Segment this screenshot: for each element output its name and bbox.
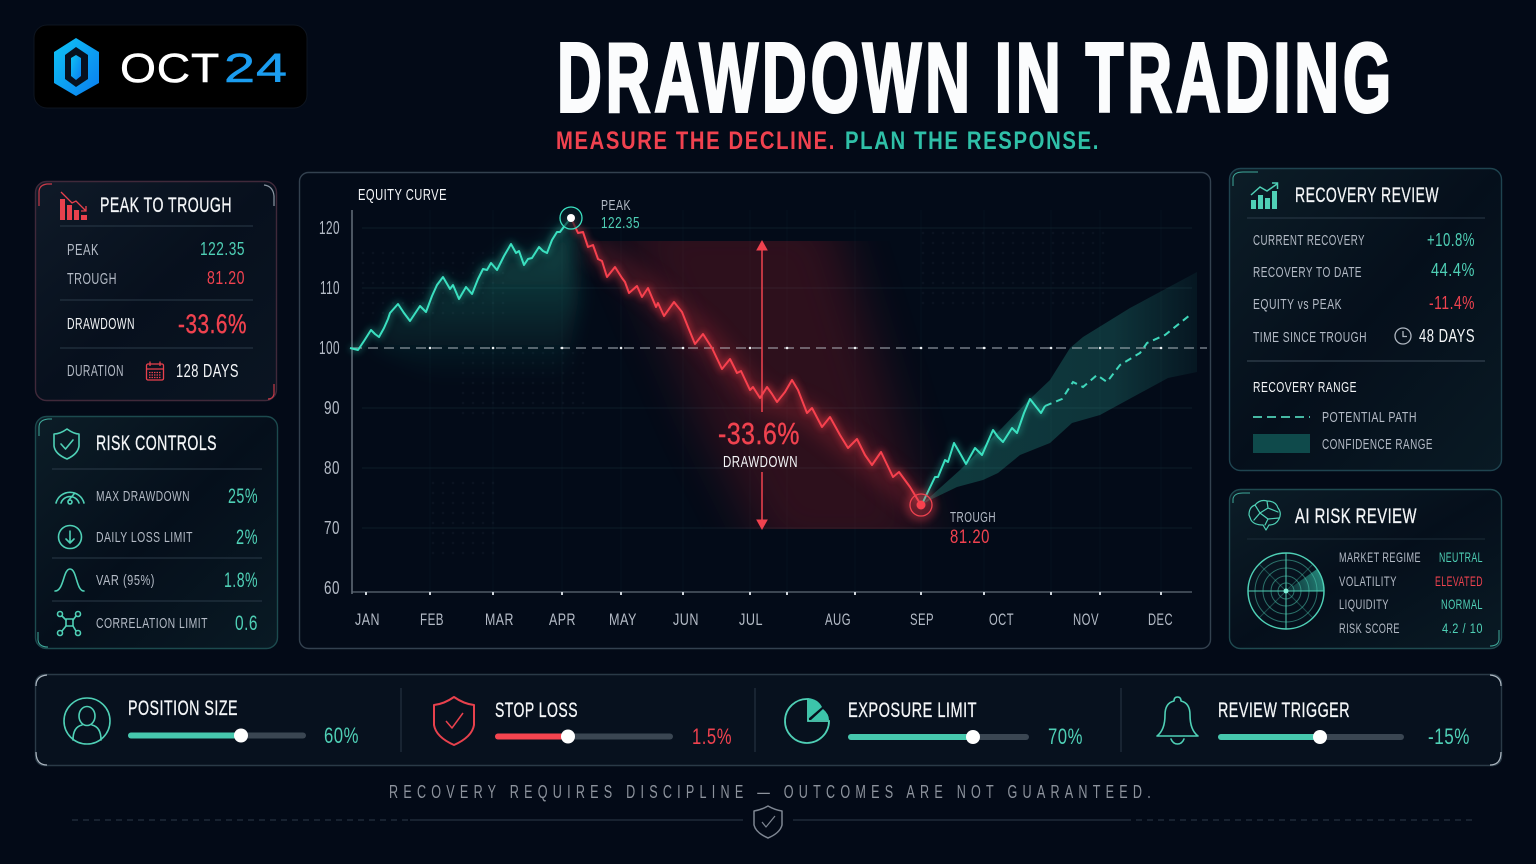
- baseline 100: [352, 347, 1207, 349]
- drawdown callout: -33.6%: [718, 416, 800, 451]
- x axis: JUN: [673, 610, 699, 629]
- x axis: [352, 592, 1192, 629]
- stat rows: PEAK: [67, 242, 99, 259]
- ai stats: ELEVATED: [1435, 573, 1483, 589]
- ai stats: NEUTRAL: [1439, 549, 1483, 565]
- stat rows: TROUGH: [67, 271, 117, 288]
- x axis: SEP: [910, 610, 934, 629]
- control: position size: POSITION SIZE: [128, 697, 238, 720]
- ai stats: MARKET REGIME: [1339, 549, 1421, 565]
- y axis: 70: [324, 518, 340, 538]
- control: review trigger: REVIEW TRIGGER: [1218, 699, 1350, 722]
- x axis: MAR: [485, 610, 514, 629]
- row: daily loss limit: DAILY LOSS LIMIT: [96, 529, 193, 546]
- confidence band: [921, 272, 1197, 505]
- stat rows: 128 DAYS: [176, 361, 239, 381]
- drawdown red zone: [582, 241, 944, 529]
- icon: brain: [1249, 500, 1280, 530]
- subtitle: MEASURE THE DECLINE.: [556, 127, 836, 155]
- drawdown arrow: [757, 241, 767, 529]
- peak label: 122.35: [601, 215, 640, 232]
- footer tagline: RECOVERY REQUIRES DISCIPLINE — OUTCOMES ARE NOT GUARANTEED.: [389, 782, 1156, 802]
- row: max drawdown: 25%: [228, 485, 258, 508]
- ai stats: [1339, 549, 1483, 636]
- icon: hexagon logo mark: [54, 38, 99, 96]
- y axis: [319, 210, 352, 598]
- recovery stats: +10.8%: [1427, 230, 1475, 250]
- equity line: recovery: [923, 399, 1045, 502]
- subtitle: PLAN THE RESPONSE.: [845, 127, 1100, 155]
- icon: bell curve: [55, 569, 84, 591]
- subtitle: [556, 127, 1100, 155]
- dot texture: [360, 225, 1110, 560]
- logo text: OCT: [120, 45, 220, 91]
- control: stop loss: 1.5%: [692, 724, 732, 749]
- icon: shield check: [54, 429, 79, 459]
- peak label: PEAK: [601, 197, 631, 214]
- x axis: OCT: [989, 610, 1014, 629]
- trough label: 81.20: [950, 527, 990, 548]
- heading: AI RISK REVIEW: [1295, 505, 1417, 528]
- recovery range legend: CONFIDENCE RANGE: [1322, 436, 1433, 453]
- icon: red shield: [434, 697, 474, 745]
- ai stats: NORMAL: [1441, 596, 1483, 612]
- row: correlation limit: [58, 612, 258, 636]
- x axis: AUG: [825, 610, 851, 629]
- control: exposure limit: EXPOSURE LIMIT: [848, 699, 977, 722]
- heading: RECOVERY REVIEW: [1295, 184, 1439, 207]
- recovery range legend: [1253, 379, 1433, 453]
- heading: RISK CONTROLS: [96, 432, 217, 455]
- recovery stats: TIME SINCE TROUGH: [1253, 329, 1367, 346]
- row: max drawdown: MAX DRAWDOWN: [96, 488, 190, 505]
- icon: gauge: [56, 492, 84, 504]
- icon: person: [64, 698, 110, 744]
- potential path dashed: [1045, 315, 1190, 406]
- panel: peak to trough: [36, 182, 276, 400]
- icon: footer shield: [754, 806, 782, 838]
- row: var: [55, 569, 258, 592]
- panel: risk controls: [36, 416, 278, 648]
- stat rows: 81.20: [207, 268, 245, 288]
- row: daily loss limit: 2%: [236, 526, 258, 549]
- recovery stats: RECOVERY TO DATE: [1253, 264, 1362, 281]
- stat rows: -33.6%: [178, 309, 247, 339]
- row: max drawdown: [56, 485, 258, 508]
- row: correlation limit: CORRELATION LIMIT: [96, 615, 208, 632]
- y axis: 120: [319, 218, 340, 238]
- panel: recovery review: [1230, 168, 1502, 470]
- logo: [34, 25, 307, 108]
- recovery stats: 48 DAYS: [1419, 326, 1475, 346]
- logo text: 24: [224, 45, 288, 91]
- heading: EQUITY CURVE: [358, 187, 447, 204]
- peak marker: [560, 207, 582, 229]
- icon: calendar: [146, 362, 164, 380]
- heading: PEAK TO TROUGH: [100, 194, 232, 217]
- y axis: 110: [320, 278, 340, 298]
- control: stop loss: STOP LOSS: [495, 699, 578, 722]
- x axis: NOV: [1073, 610, 1099, 629]
- control: exposure limit: 70%: [1048, 724, 1083, 749]
- panel: equity curve chart: [300, 172, 1210, 648]
- icon: bell: [1157, 697, 1198, 744]
- drawdown callout: [718, 416, 800, 471]
- x axis: APR: [549, 610, 576, 629]
- stat rows: 122.35: [200, 239, 245, 259]
- row: var: 1.8%: [224, 569, 258, 592]
- stat rows: [60, 239, 253, 381]
- x axis: MAY: [609, 610, 637, 629]
- icon: pie: [785, 698, 829, 743]
- control: exposure limit: [785, 698, 1083, 749]
- icon: network: [58, 612, 80, 636]
- icon: rising bars: [1251, 183, 1278, 209]
- control: position size: 60%: [324, 723, 359, 748]
- control: stop loss: [434, 697, 732, 749]
- y axis: 60: [324, 578, 340, 598]
- drawdown callout: DRAWDOWN: [723, 454, 798, 471]
- row: daily loss limit: [58, 526, 258, 549]
- x axis: DEC: [1148, 610, 1173, 629]
- control: review trigger: -15%: [1428, 724, 1470, 749]
- panel: bottom controls: [36, 674, 1502, 766]
- stat rows: DURATION: [67, 363, 124, 380]
- control: review trigger: [1157, 697, 1470, 749]
- peak label: [601, 197, 640, 232]
- ai stats: RISK SCORE: [1339, 620, 1400, 636]
- stat rows: DRAWDOWN: [67, 316, 135, 333]
- y axis: 80: [324, 458, 340, 478]
- ai stats: VOLATILITY: [1339, 573, 1397, 589]
- ai stats: LIQUIDITY: [1339, 596, 1389, 612]
- trough label: [950, 509, 996, 548]
- icon: falling bars: [60, 192, 87, 220]
- recovery stats: CURRENT RECOVERY: [1253, 232, 1365, 249]
- x axis: JUL: [739, 610, 763, 629]
- y axis: 100: [319, 338, 340, 358]
- equity line: rise to peak: [350, 218, 571, 350]
- row: correlation limit: 0.6: [235, 612, 258, 635]
- recovery range legend: POTENTIAL PATH: [1322, 409, 1417, 426]
- icon: down circle: [58, 526, 82, 548]
- x axis: FEB: [420, 610, 444, 629]
- recovery stats: -11.4%: [1429, 293, 1475, 313]
- recovery stats: EQUITY vs PEAK: [1253, 296, 1342, 313]
- ai stats: 4.2 / 10: [1442, 620, 1483, 636]
- control: position size: [64, 697, 359, 748]
- radar chart: [1248, 553, 1324, 629]
- icon: clock: [1395, 328, 1411, 344]
- trough label: TROUGH: [950, 509, 996, 526]
- trough marker: [905, 490, 937, 522]
- grid: [362, 210, 1192, 592]
- recovery stats: [1253, 230, 1475, 346]
- footer divider with shield: [72, 806, 1475, 838]
- range lines: [600, 241, 922, 529]
- recovery stats: 44.4%: [1431, 260, 1475, 280]
- x axis: JAN: [355, 610, 380, 629]
- recovery range legend: RECOVERY RANGE: [1253, 379, 1357, 396]
- logo text: [120, 45, 288, 91]
- row: var: VAR (95%): [96, 572, 155, 589]
- green area glow: [372, 222, 578, 380]
- y axis: 90: [324, 398, 340, 418]
- panel: ai risk review: [1230, 490, 1502, 648]
- equity line: drawdown: [571, 218, 921, 505]
